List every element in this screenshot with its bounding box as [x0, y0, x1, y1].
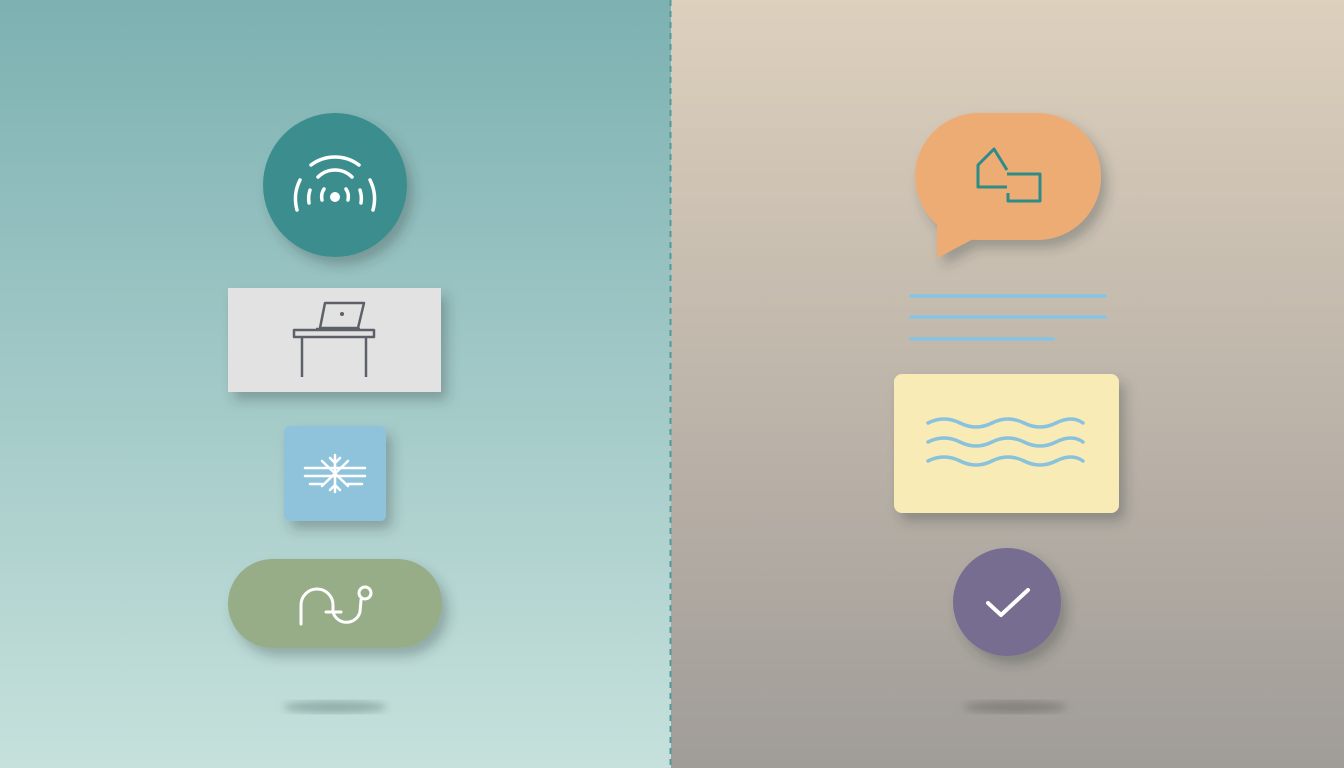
icon: speech bubble — [915, 113, 1101, 258]
panel: left background — [0, 0, 671, 768]
icon: snowflake card — [284, 426, 386, 521]
divider — [670, 0, 672, 768]
icon: path pill — [228, 559, 442, 648]
icon: wifi circle — [263, 113, 407, 257]
panel: right background — [671, 0, 1344, 768]
icon: wave card — [894, 374, 1119, 513]
text lines — [911, 296, 1105, 339]
shadow right — [963, 701, 1067, 713]
shadow left — [283, 701, 387, 713]
icon: desk card — [228, 288, 441, 392]
icon: check circle — [953, 548, 1061, 656]
